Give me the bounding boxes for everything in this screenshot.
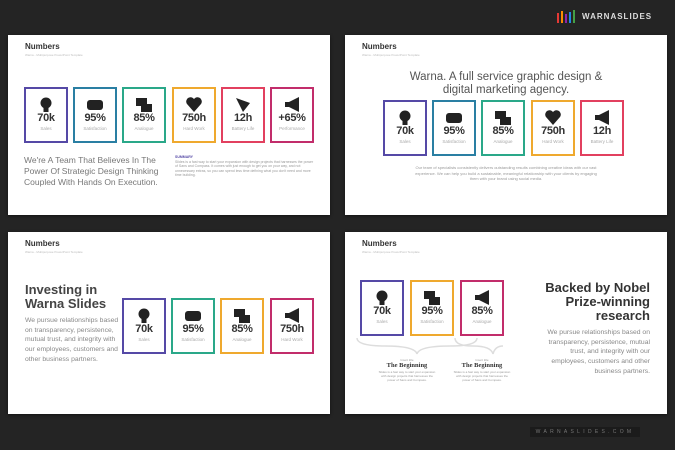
stat boxes: Sales — [399, 139, 411, 144]
stat boxes: 12h — [234, 112, 252, 124]
stat boxes: Satisfaction — [420, 319, 444, 324]
stat boxes: Hard Work — [542, 139, 564, 144]
heading: Investing in — [25, 282, 97, 297]
stat boxes: 70k — [135, 323, 153, 335]
stat boxes: 95% — [443, 125, 465, 137]
stat boxes: Sales — [40, 126, 52, 131]
slide 4: Numbers — [362, 239, 397, 248]
stat boxes — [383, 100, 624, 156]
stat boxes — [360, 280, 504, 336]
logo: WARNASLIDES — [582, 12, 652, 21]
stat boxes: Analogue — [232, 337, 252, 342]
milestone 2: Insert title Slides is a fast way to start your expansion with design projects that harnesses the power of Sans and Compass. — [454, 358, 510, 382]
slide 3: Warna - Multipurpose PowerPoint Template — [25, 250, 83, 254]
stat boxes: 12h — [593, 125, 611, 137]
slide 4 — [345, 232, 667, 414]
stat boxes: 70k — [396, 125, 414, 137]
stat boxes: Satisfaction — [83, 126, 107, 131]
stat boxes: Battery Life — [591, 139, 613, 144]
summary: SUMMARY — [175, 155, 193, 159]
slide 4: Warna - Multipurpose PowerPoint Template — [362, 250, 420, 254]
stat boxes: 95% — [182, 323, 204, 335]
milestone 2: The Beginning — [462, 362, 502, 369]
slide 2: Numbers — [362, 42, 397, 51]
heading — [545, 280, 650, 323]
stat boxes: 750h — [182, 112, 206, 124]
heading — [25, 282, 106, 311]
logo — [557, 10, 652, 23]
stat boxes: Performance — [279, 126, 305, 131]
summary: Slides is a fast way to start your expansion with design projects that harnesses the power of Sans and Compass. It comes with just enough to get you on your way, and not unnecessary extras, so you can spend less time defining what you don't need and more time building. — [175, 160, 313, 177]
stat boxes: 95% — [84, 112, 106, 124]
stat boxes: Satisfaction — [181, 337, 205, 342]
milestone 1: Insert title Slides is a fast way to start your expansion with design projects that harnesses the power of Sans and Compass. — [379, 358, 435, 382]
heading: Warna. A full service graphic design & digital marketing agency. — [410, 71, 602, 96]
stat boxes: Sales — [138, 337, 150, 342]
stat boxes: 85% — [492, 125, 514, 137]
slide 1 — [8, 35, 330, 215]
slide 2 — [345, 35, 667, 215]
heading: research — [596, 308, 650, 323]
stat boxes: Hard Work — [281, 337, 303, 342]
stat boxes: 70k — [373, 305, 391, 317]
stat boxes: 750h — [280, 323, 304, 335]
stat boxes: 85% — [231, 323, 253, 335]
stat boxes: Satisfaction — [442, 139, 466, 144]
tagline: We're A Team That Believes In The Power Of Strategic Design Thinking Coupled With Hands On Execution. — [24, 155, 158, 187]
stat boxes: 85% — [133, 112, 155, 124]
stat boxes: 750h — [541, 125, 565, 137]
heading: Warna Slides — [25, 296, 106, 311]
braces — [356, 338, 503, 354]
stat boxes — [122, 298, 314, 354]
slide 2: Warna - Multipurpose PowerPoint Template — [362, 53, 420, 57]
slide 1: Warna - Multipurpose PowerPoint Template — [25, 53, 83, 57]
stat boxes: Sales — [376, 319, 388, 324]
watermark: WARNASLIDES.COM — [536, 429, 634, 435]
stat boxes: 95% — [421, 305, 443, 317]
slide 3 — [8, 232, 330, 414]
stat boxes: 85% — [471, 305, 493, 317]
milestone 1: The Beginning — [387, 362, 427, 369]
heading: Prize-winning — [566, 294, 650, 309]
slide 3: Numbers — [25, 239, 60, 248]
paragraph: We pursue relationships based on transparency, persistence, mutual trust, and integrity with our employees, customers and other business partners. — [25, 317, 118, 363]
paragraph: Our team of specialists consistently delivers outstanding results combining creative ideas with our vast experience. We can help you build a sustainable, meaningful relationship with your clients by engaging them with your brand using social media. — [415, 165, 597, 181]
stat boxes: Hard Work — [183, 126, 205, 131]
paragraph: We pursue relationships based on transparency, persistence, mutual trust, and integrity with our employees, customers and other business partners. — [547, 329, 650, 375]
watermark — [530, 427, 640, 437]
stat boxes: Analogue — [472, 319, 492, 324]
stat boxes: +65% — [278, 112, 306, 124]
slide 1: Numbers — [25, 42, 60, 51]
stat boxes: 70k — [37, 112, 55, 124]
stat boxes: Battery Life — [232, 126, 254, 131]
heading: Backed by Nobel — [545, 280, 650, 295]
stat boxes: Analogue — [134, 126, 154, 131]
stat boxes: Analogue — [493, 139, 513, 144]
stat boxes — [24, 87, 314, 143]
